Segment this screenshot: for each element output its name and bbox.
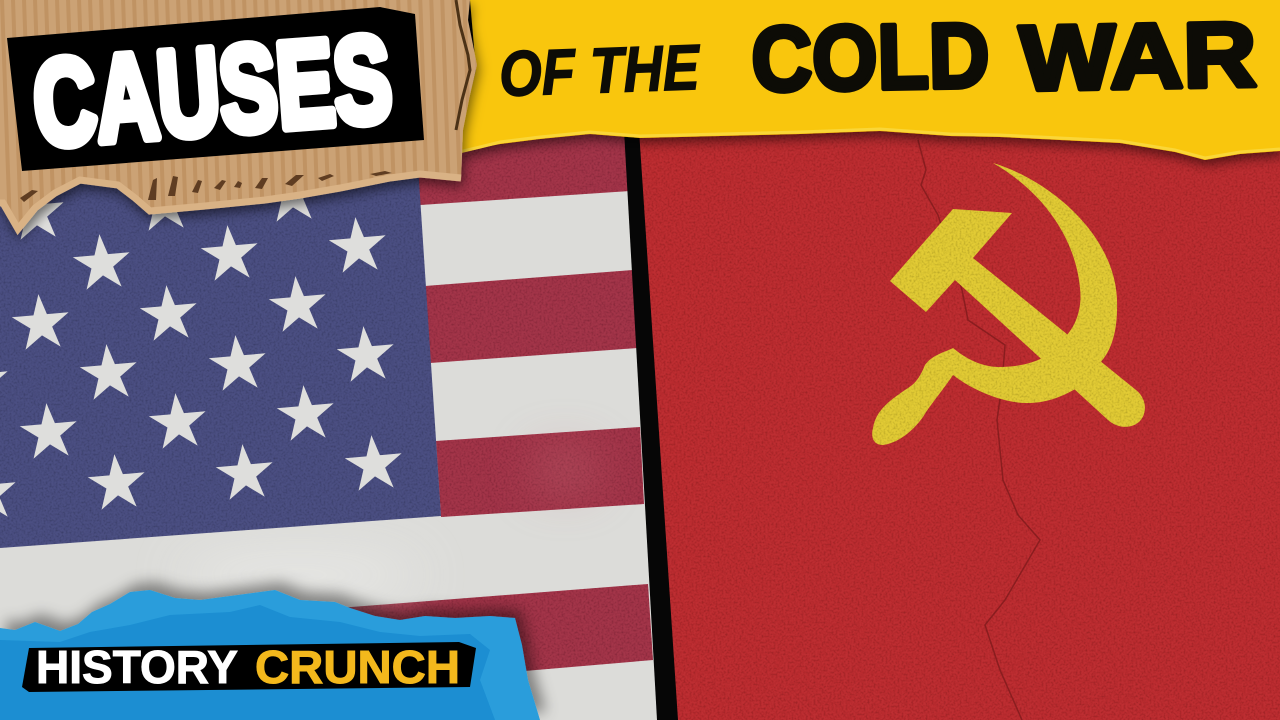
title: of the: OF THE bbox=[498, 31, 702, 110]
cardboard torn right edge bbox=[456, 0, 470, 130]
panel: blue torn paper bbox=[0, 590, 540, 720]
flag red stripe wear bbox=[535, 452, 595, 488]
flag white stripe wear bbox=[180, 557, 420, 593]
banner torn edge bbox=[459, 129, 1280, 158]
black divider line bbox=[624, 130, 678, 720]
hammer bbox=[890, 209, 1145, 427]
banner: yellow torn paper bbox=[459, 0, 1280, 160]
panel: American flag bbox=[0, 120, 670, 720]
logo word: crunch: CRUNCH bbox=[255, 641, 460, 693]
sickle bbox=[872, 163, 1117, 445]
cardboard torn bottom band bbox=[0, 174, 461, 229]
logo: history crunch bbox=[22, 641, 476, 693]
flag canton bbox=[0, 120, 441, 548]
title: cold: COLD bbox=[751, 5, 990, 111]
logo black plate bbox=[22, 642, 476, 692]
wall cracks bbox=[918, 140, 1040, 720]
causes black plate bbox=[7, 7, 424, 171]
panel: Soviet flag bbox=[624, 120, 1280, 720]
cardboard torn bottom edge bbox=[20, 171, 392, 202]
icon: hammer and sickle bbox=[872, 163, 1145, 445]
flag red stripes bbox=[300, 130, 653, 690]
title: war: WAR bbox=[1019, 4, 1257, 110]
logo word: history: HISTORY bbox=[36, 641, 238, 693]
causes text: CAUSES bbox=[29, 10, 396, 172]
label: causes bbox=[7, 7, 424, 172]
panel: torn cardboard bbox=[0, 0, 477, 232]
flag stars bbox=[0, 164, 405, 521]
title: of the cold war bbox=[498, 4, 1257, 111]
blue paper inner sheet bbox=[0, 605, 495, 720]
